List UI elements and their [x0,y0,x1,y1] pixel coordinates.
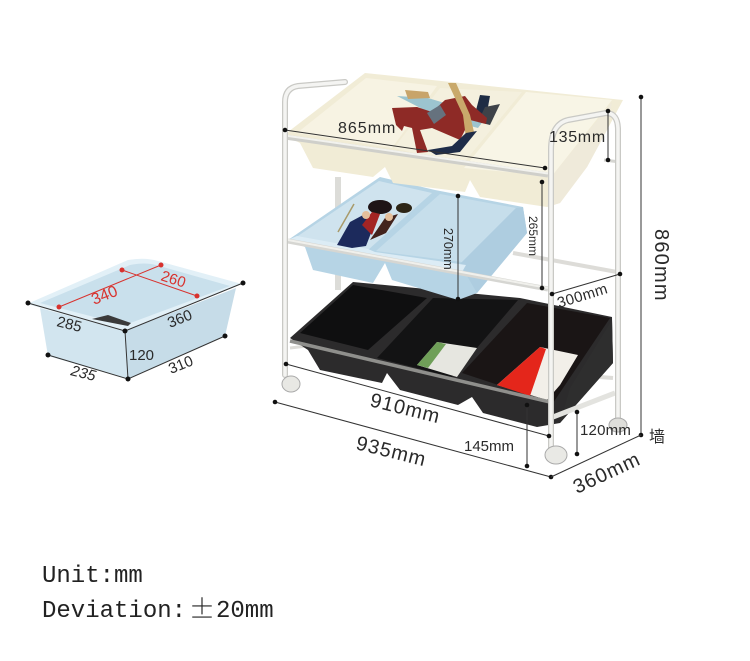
dimension: 865mm: 865mm [338,120,396,137]
panel: single bin dimensions [26,259,246,385]
blue middle bins [288,177,527,300]
dimension: 135mm [549,109,610,162]
outer dimension lines and labels: 360 [165,307,195,332]
front frame tubes [285,82,618,452]
dimension: 120mm: 120mm [580,422,631,439]
outer dimension lines and labels: 310 [166,353,196,378]
cream top bins [284,73,623,207]
deviation note: 20mm [216,598,274,625]
outer dimension lines and labels [26,280,246,385]
icon: light blue bin [27,259,242,379]
deviation note [42,589,274,626]
outer dimension lines and labels: 120 [129,347,154,364]
dimension: 360mm [551,435,644,499]
dimension: 300mm: 300mm [555,280,610,312]
inner width dimension 340 [56,262,164,310]
black bottom bins [290,282,613,427]
inner depth dimension 260: 260 [159,268,188,292]
deviation note: ± [189,589,215,626]
dimension: 935mm: 935mm [354,433,429,471]
dimension: 360mm: 360mm [570,448,644,499]
dimension: 910mm: 910mm [368,390,443,428]
inner width dimension 340: 340 [89,283,120,309]
back frame posts and rails [290,160,620,378]
dimension: 120mm [575,410,631,456]
book: red [497,347,578,400]
wall label: 墙 [649,428,665,446]
inner depth dimension 260 [120,268,200,298]
dimension: 135mm: 135mm [549,129,606,146]
dimension: 935mm [273,400,553,479]
panel: trolley with bins [273,73,672,499]
dimension: 860mm [639,95,672,437]
toy soldiers [337,200,412,248]
dimension: 270mm: 270mm [441,228,455,270]
toy rocking horse [392,83,500,155]
casters [282,376,627,464]
dimension: 300mm [550,272,622,312]
book: green [417,342,477,377]
deviation note: Deviation: [42,598,186,625]
outer dimension lines and labels: 285 [55,313,83,336]
dimension: 265mm: 265mm [526,216,540,256]
unit note: Unit:mm [42,563,143,590]
dimension: 265mm [526,180,544,290]
dimension: 270mm [441,194,460,301]
outer dimension lines and labels: 235 [68,362,98,385]
dimension: 145mm [464,403,529,468]
dimension: 910mm [284,362,551,438]
dimension: 865mm [283,120,547,170]
dimension: 860mm: 860mm [650,229,672,302]
front shelf rails [285,136,615,417]
dimension: 145mm: 145mm [464,438,514,455]
